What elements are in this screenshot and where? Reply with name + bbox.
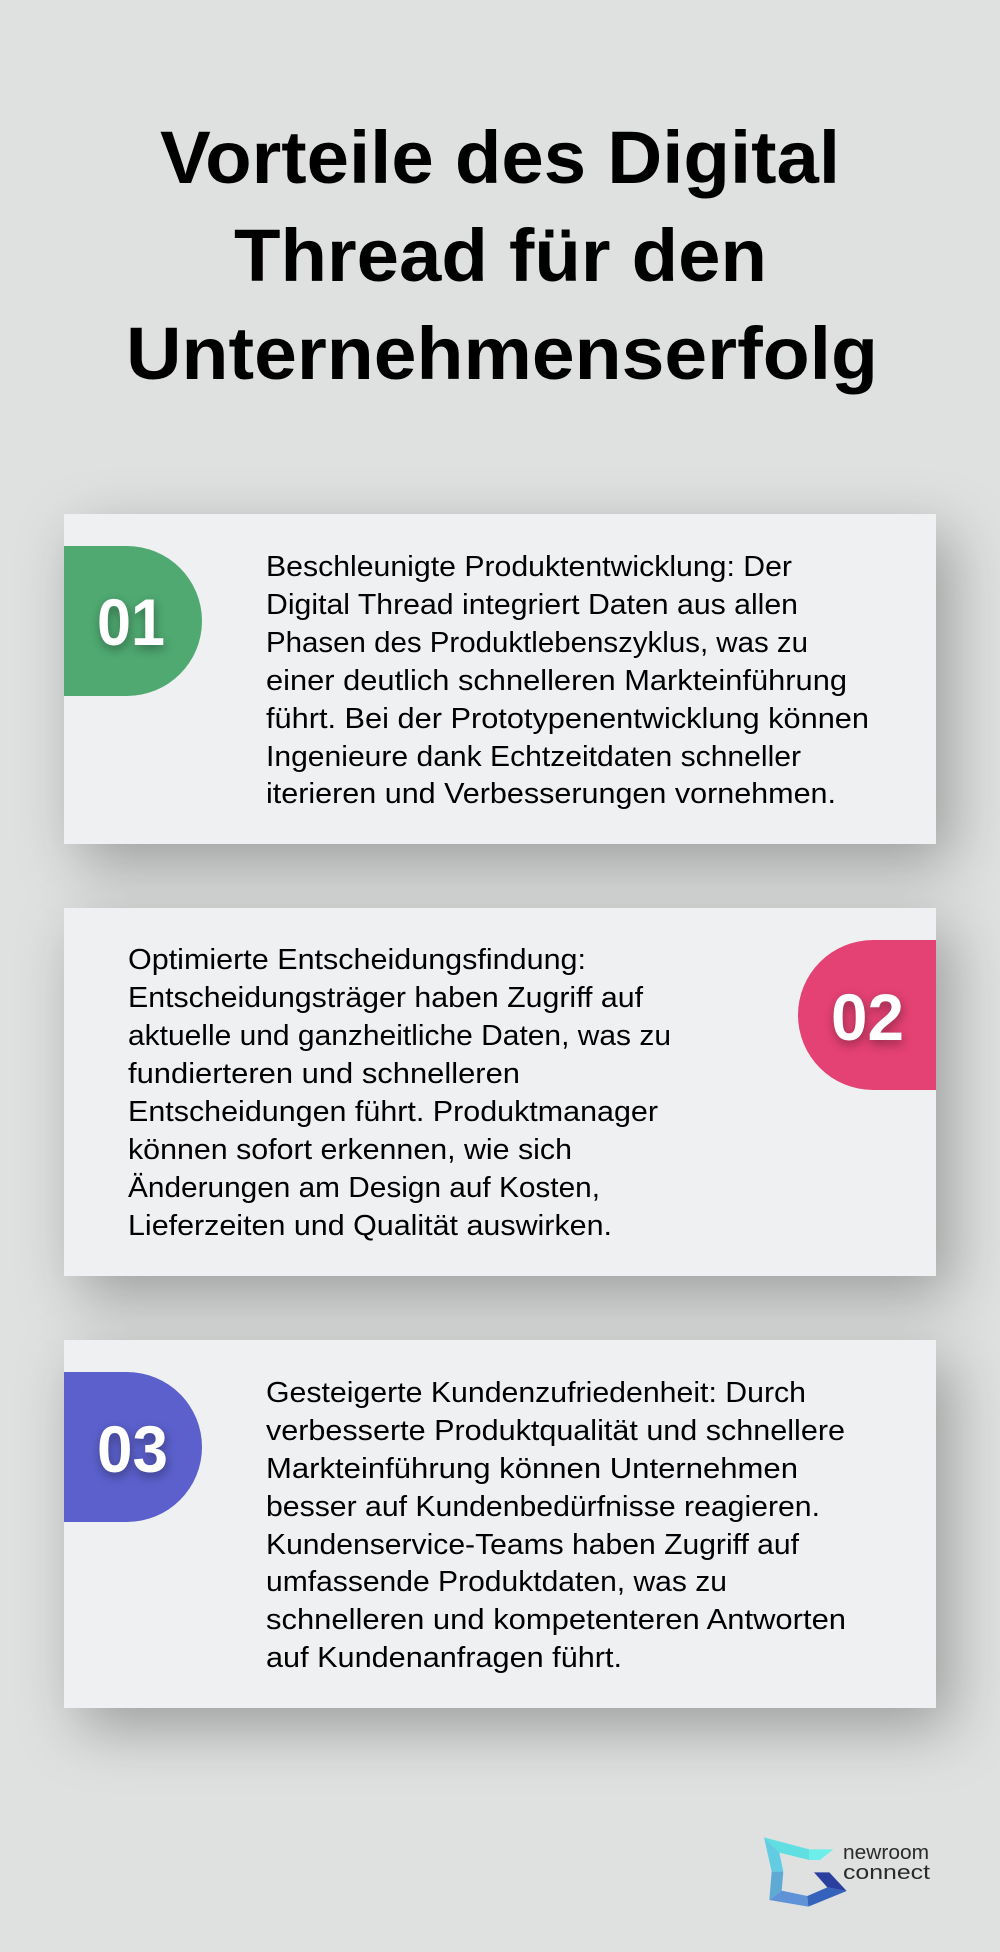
panel: card 01: [64, 514, 936, 844]
text block: card 02: aktuelle und ganzheitliche Daten, was zu: [128, 1020, 671, 1052]
logo wordmark: [843, 1841, 930, 1884]
badge 02: [798, 940, 936, 1090]
text block: card 03: auf Kundenanfragen führt.: [266, 1642, 622, 1674]
text block: card 02: Änderungen am Design auf Kosten,: [128, 1172, 600, 1204]
text block: card 03: schnelleren und kompetenteren Antworten: [266, 1604, 846, 1636]
logo wordmark: newroom: [843, 1841, 929, 1864]
logo: newroom connect: [764, 1837, 930, 1907]
title: Thread für den: [234, 214, 767, 297]
text block: card 01: Ingenieure dank Echtzeitdaten schneller: [266, 741, 801, 773]
title: Unternehmenserfolg: [126, 312, 878, 395]
text block: card 03: besser auf Kundenbedürfnisse reagieren.: [266, 1491, 820, 1523]
text block: card 03: Markteinführung können Unternehmen: [266, 1453, 798, 1485]
title: Vorteile des Digital: [160, 116, 840, 199]
panel: card 03: [64, 1340, 936, 1708]
text block: card 03: Kundenservice-Teams haben Zugriff auf: [266, 1529, 800, 1561]
text block: card 03: umfassende Produktdaten, was zu: [266, 1566, 727, 1598]
badge 03: [64, 1372, 202, 1522]
text block: card 03: [266, 1377, 846, 1674]
text block: card 01: Digital Thread integriert Daten aus allen: [266, 589, 798, 621]
text block: card 01: einer deutlich schnelleren Markteinführung: [266, 665, 847, 697]
logo wordmark: connect: [843, 1861, 930, 1884]
text block: card 03: Gesteigerte Kundenzufriedenheit: Durch: [266, 1377, 806, 1409]
text block: card 02: fundierteren und schnelleren: [128, 1058, 520, 1090]
text block: card 01: [266, 551, 869, 810]
badge 03: 03: [97, 1412, 168, 1486]
text block: card 02: Entscheidungsträger haben Zugriff auf: [128, 982, 644, 1014]
text block: card 01: iterieren und Verbesserungen vornehmen.: [266, 778, 836, 810]
text block: card 02: Lieferzeiten und Qualität auswirken.: [128, 1210, 612, 1242]
badge 01: [64, 546, 202, 696]
text block: card 02: Entscheidungen führt. Produktmanager: [128, 1096, 658, 1128]
text block: card 01: Phasen des Produktlebenszyklus, was zu: [266, 627, 808, 659]
badge 01: 01: [97, 585, 165, 659]
text block: card 03: verbesserte Produktqualität und schnellere: [266, 1415, 845, 1447]
icon: logo mark: [764, 1837, 847, 1907]
text block: card 02: können sofort erkennen, wie sich: [128, 1134, 572, 1166]
text block: card 02: Optimierte Entscheidungsfindung:: [128, 944, 586, 976]
badge 02: 02: [831, 980, 904, 1054]
panel: card 02: [64, 908, 936, 1276]
text block: card 01: Beschleunigte Produktentwicklung: Der: [266, 551, 792, 583]
title: [126, 116, 878, 395]
text block: card 01: führt. Bei der Prototypenentwicklung können: [266, 703, 869, 735]
text block: card 02: [128, 944, 671, 1242]
